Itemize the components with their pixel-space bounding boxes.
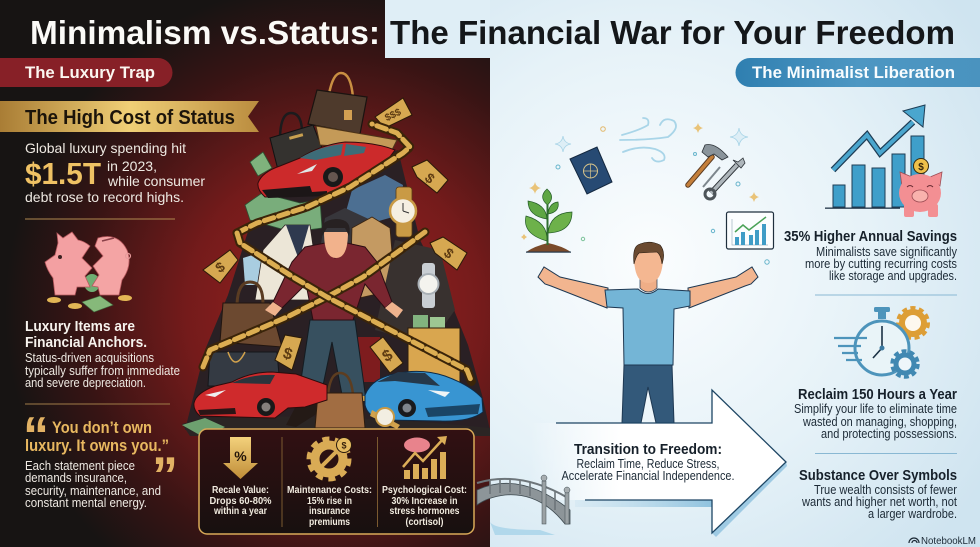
tag: dollar left: $: [212, 258, 228, 276]
white blazer: [255, 225, 315, 300]
cash stack large: [245, 193, 322, 232]
stat: reclaim 150 hours a year: wasted on managing, shopping,: [802, 415, 957, 429]
tag: dollar right middle: $: [441, 244, 457, 262]
stat: substance over symbols: wants and higher net worth, not: [801, 495, 957, 509]
pill heading: The Minimalist Liberation: The Minimalist Liberation: [752, 63, 955, 82]
stat: resale value: [210, 485, 272, 517]
stat: substance over symbols: [799, 467, 957, 521]
sparkles and dots decoration: [521, 123, 769, 264]
quote: you don't own luxury: You don’t own: [52, 419, 152, 437]
stat: maintenance costs: [287, 485, 372, 528]
icon: brown handbag left: [220, 282, 282, 347]
tag: dollar chest left: [275, 335, 302, 370]
stat: substance over symbols: True wealth consists of fewer: [814, 483, 957, 497]
dark goods right: [375, 240, 455, 345]
illustration: pile of luxury goods with chained man: [182, 73, 490, 438]
icon: percent down arrow: %: [234, 448, 247, 464]
stat: substance over symbols: a larger wardrobe.: [868, 507, 957, 521]
icon: red sports car top: [258, 142, 395, 198]
pile backdrop: [185, 150, 490, 430]
tag: dollar chest right: $: [380, 347, 396, 366]
head: [324, 232, 348, 258]
icon: gold wristwatch top: [390, 187, 416, 237]
head: [634, 245, 663, 283]
icon: bridge: [477, 475, 570, 535]
background: dark luxury side: [0, 0, 490, 547]
stat: resale value: within a year: [213, 506, 267, 517]
pants: [622, 365, 674, 423]
title: [30, 14, 955, 51]
icon: plant sprout: [525, 189, 572, 253]
icon: brain and rising chart: [403, 436, 447, 479]
tan box: [316, 126, 397, 150]
tag: triple dollar: $$$: [383, 107, 403, 124]
icon: gold watch bottom: [370, 408, 400, 429]
pale blue cloth: [243, 252, 262, 285]
quote: you don't own luxury: Each statement piece: [25, 459, 135, 473]
logo: NotebookLM: NotebookLM: [921, 535, 976, 547]
text: luxury items are financial anchors: Status-driven acquisitions: [25, 351, 154, 365]
text: transition to freedom: Transition to Freedom:: [574, 442, 722, 458]
stat: reclaim 150 hours a year: Simplify your life to eliminate time: [794, 402, 957, 416]
bag: brown front: [315, 373, 365, 428]
ribbon heading: The High Cost of Status: [0, 101, 259, 132]
panel: hidden costs stats: [199, 429, 474, 534]
title: Minimalism vs.Status:: [30, 14, 380, 51]
arrow shadow: [575, 500, 712, 507]
stat: global luxury spending: $1.5T: [25, 156, 101, 191]
stat: psychological cost: Psychological Cost:: [382, 485, 467, 496]
text: luxury items are financial anchors: Luxury Items are: [25, 318, 135, 335]
stat: global luxury spending: Global luxury spending hit: [25, 140, 186, 156]
stat: psychological cost: 30% Increase in: [392, 496, 458, 507]
shirt and arms: [273, 243, 392, 320]
text: transition to freedom: [562, 442, 734, 483]
stat: psychological cost: (cortisol): [406, 517, 444, 528]
hands: [265, 302, 282, 316]
pill heading: The Minimalist Liberation: [736, 58, 980, 87]
ribbon heading: The High Cost of Status: The High Cost of Status: [25, 107, 235, 129]
stat: psychological cost: stress hormones: [390, 506, 460, 517]
icon: rising bar chart with piggy bank: [825, 105, 942, 217]
text: luxury items are financial anchors: Financial Anchors.: [25, 334, 147, 351]
tan blazer: [350, 217, 395, 300]
icon: yellow shopping bag: [408, 315, 460, 385]
title: The Financial War for Your Freedom: [390, 14, 955, 51]
stat: maintenance costs: Maintenance Costs:: [287, 485, 372, 496]
man: arms outstretched: [538, 242, 758, 423]
stat: 35% higher annual savings: more by cutting recurring costs: [805, 257, 957, 271]
shirt: [605, 289, 690, 365]
chains: [203, 124, 472, 383]
quote: you don't own luxury: constant mental energy.: [25, 496, 147, 510]
stat: reclaim 150 hours a year: [794, 386, 957, 441]
icon: rising bar chart with piggy bank: $: [918, 162, 924, 173]
icon: framed growth chart: [726, 212, 774, 249]
text: luxury items are financial anchors: typically suffer from immediate: [25, 364, 180, 378]
stat: 35% higher annual savings: Minimalists save significantly: [816, 245, 958, 259]
tag: dollar right middle: [430, 237, 467, 270]
stat: reclaim 150 hours a year: Reclaim 150 Hours a Year: [798, 386, 957, 403]
icon: passport: [570, 147, 612, 194]
text: luxury items are financial anchors: and severe depreciation.: [25, 376, 146, 390]
pill heading: The Luxury Trap: The Luxury Trap: [25, 63, 155, 82]
pants: [298, 320, 366, 400]
pill heading: The Luxury Trap: [0, 58, 172, 87]
arrow: transition to freedom: [530, 390, 787, 537]
text: transition to freedom: Accelerate Financial Independence.: [562, 469, 734, 483]
icon: hammer and wrench: [688, 144, 745, 199]
stat: reclaim 150 hours a year: and protecting possessions.: [821, 427, 957, 441]
stat: psychological cost: [382, 485, 467, 528]
hair: [634, 242, 664, 264]
icon: gear with wrench: [309, 438, 352, 479]
red bag: [358, 337, 380, 382]
icon: dark shopping bag: [208, 352, 280, 386]
ground strip: [182, 416, 490, 436]
tag: dollar chest left: $: [281, 345, 294, 364]
icon: wind swirl: [620, 118, 676, 162]
stat: resale value: Recale Value:: [212, 485, 269, 496]
arms: [538, 267, 608, 308]
stat: global luxury spending: in 2023,: [107, 158, 157, 174]
panel: the luxury trap text column: [0, 58, 259, 510]
text: transition to freedom: Reclaim Time, Reduce Stress,: [576, 457, 720, 471]
icon: monogram tote bag: [308, 73, 367, 134]
dark garment: [320, 208, 375, 250]
background: light minimalist side: [490, 0, 980, 547]
quote: you don't own luxury: ”: [152, 447, 178, 505]
stat: global luxury spending: while consumer: [107, 173, 205, 189]
icon: silver wristwatch: [418, 263, 438, 308]
quote: you don't own luxury: “: [23, 407, 49, 465]
stat: maintenance costs: premiums: [309, 517, 350, 528]
tag: triple dollar: [375, 98, 412, 128]
quote: you don't own luxury: luxury. It owns you.”: [25, 437, 169, 455]
tag: dollar left: [203, 250, 238, 283]
stat: global luxury spending: [25, 140, 205, 205]
text: luxury items are financial anchors: [25, 318, 180, 390]
stat: 35% higher annual savings: like storage and upgrades.: [829, 269, 957, 283]
icon: percent down arrow: [223, 437, 258, 479]
shoes: [286, 402, 318, 427]
stat: substance over symbols: Substance Over Symbols: [799, 467, 957, 484]
icon: stopwatch with gears: [834, 307, 928, 377]
stat: maintenance costs: insurance: [309, 506, 350, 517]
icon: blue sports car: [365, 371, 483, 421]
stat: maintenance costs: 15% rise in: [307, 496, 352, 507]
stat: 35% higher annual savings: 35% Higher Annual Savings: [784, 228, 957, 245]
background: light title tab: [385, 0, 490, 58]
icon: black handbag: [270, 113, 322, 170]
stat: global luxury spending: debt rose to record highs.: [25, 189, 184, 205]
tag: dollar chest right: [370, 337, 403, 373]
icon: broken piggy bank: [45, 232, 132, 312]
icon: gear with wrench: $: [341, 440, 347, 450]
stat: resale value: Drops 60-80%: [210, 496, 272, 507]
cash stack small: [250, 152, 272, 176]
quote: you don't own luxury: [23, 407, 178, 510]
quote: you don't own luxury: security, maintenance, and: [25, 484, 161, 498]
man: chained figure: [265, 219, 403, 427]
tag: dollar right upper: $: [422, 169, 438, 187]
tag: dollar right upper: [412, 160, 448, 193]
neck: [640, 272, 657, 292]
quote: you don't own luxury: demands insurance,: [25, 471, 127, 485]
bottom cash: [182, 418, 225, 438]
stat: 35% higher annual savings: [784, 228, 958, 283]
blue denim clothes: [345, 175, 403, 225]
icon: red sports car bottom: [194, 372, 327, 418]
